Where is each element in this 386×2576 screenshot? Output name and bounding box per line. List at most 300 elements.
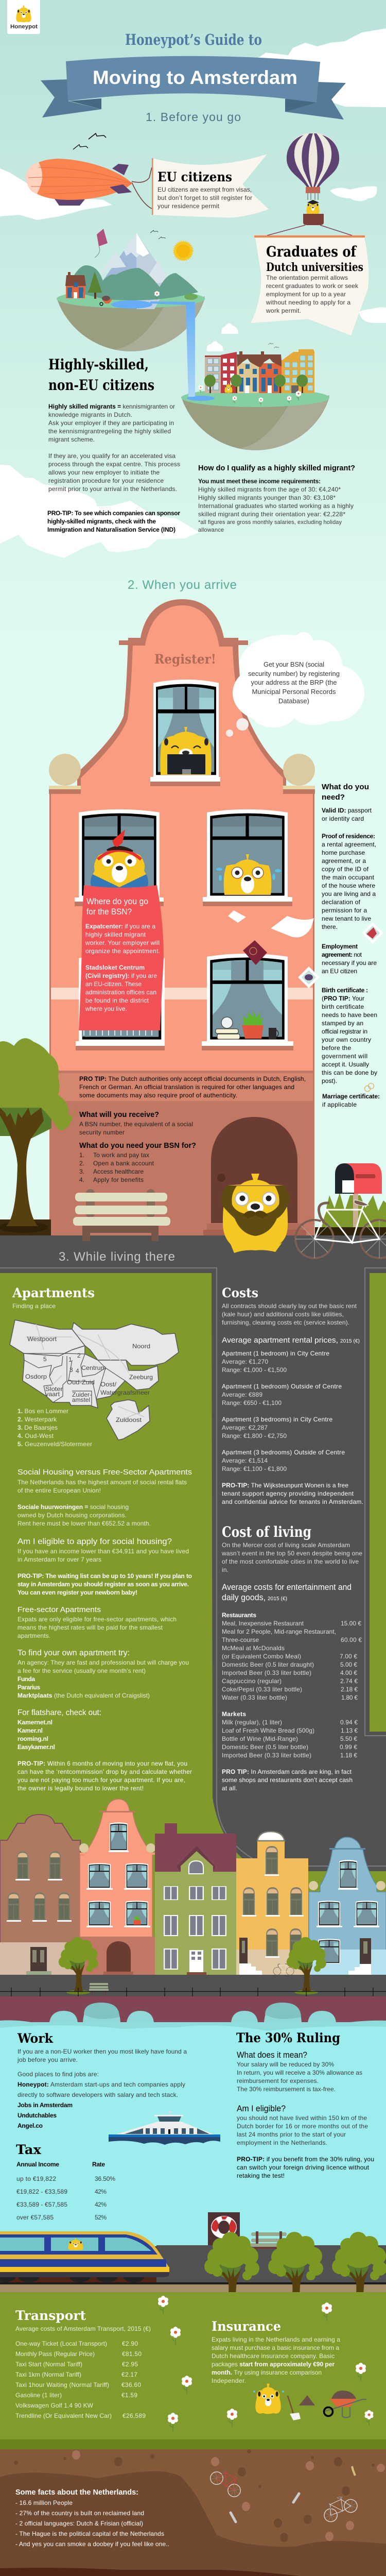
map labels: Centrum (81, 1364, 106, 1371)
text: how do I qualify: *all figures are gross monthly salaries, excluding holiday (198, 519, 342, 526)
text: highly skilled migrants: registration procedure for your residence (48, 477, 164, 484)
heading: average costs (222, 1582, 352, 1602)
house C green (155, 1823, 236, 1976)
text column: what do you need: Valid ID: passport (322, 807, 372, 814)
pro tip: documents: some documents may also require proof of authenticity. (79, 1092, 237, 1099)
text: how do I qualify: International graduates who started working as a highly (198, 502, 354, 510)
find your apartment: To find your own apartment try: (17, 1649, 130, 1657)
heading: Highly-skilled (48, 356, 154, 394)
map labels: amstel (72, 1396, 90, 1403)
pro tip: driving licence: retaking the test! (237, 2172, 285, 2179)
transport table: €2.90 (122, 2340, 138, 2347)
heading: where do you go: Where do you go (86, 897, 148, 906)
tax table: €33,589 - €57,585 (16, 2201, 67, 2208)
mountains (66, 233, 198, 309)
table: restaurants: Coke/Pepsi (0.33 liter bottle) (222, 1686, 302, 1693)
table: markets: Markets (222, 1710, 246, 1718)
text column: what do you need: permission for a (322, 907, 367, 914)
tax table: Annual Income (16, 2161, 59, 2168)
transport table: Gasoline (1 liter) (15, 2392, 62, 2399)
what do you need BSN for: 1. (79, 1151, 84, 1159)
pro tip: documents: French or German. An official translation is required for other languages and (79, 1083, 294, 1091)
social housing (17, 1468, 192, 1527)
pro tip: documents (79, 1075, 306, 1099)
pro tip: sponsors (47, 510, 180, 533)
text column: what do you need: new tenant to live (322, 915, 371, 922)
tax table: 52% (95, 2214, 107, 2221)
what do you need BSN for: Apply for benefits (93, 1176, 144, 1183)
costs intro: All contracts should clearly lay out the basic rent (222, 1302, 357, 1310)
heading: average costs: daily goods, (222, 1592, 266, 1602)
buried bikes and bottles (208, 2464, 359, 2524)
Mercer text (221, 1541, 362, 1573)
find your apartment: Funda (17, 1675, 35, 1683)
rental prices: Range: €1,100 - €1,800 (222, 1465, 287, 1472)
table: restaurants: Water (0.33 liter bottle) (222, 1694, 287, 1701)
house B salmon (79, 1799, 155, 1975)
what do you need BSN for: Access healthcare (93, 1168, 144, 1175)
panel: transport (15, 2308, 151, 2419)
house D yellow (236, 1832, 308, 1975)
tax table: 42% (95, 2188, 107, 2195)
table: restaurants: McMeal at McDonalds (222, 1645, 285, 1652)
bubble text (248, 660, 340, 705)
insurance text: Independer. (212, 2377, 246, 2384)
work text: Jobs in Amsterdam (17, 2102, 73, 2109)
heading: EU citizens: EU citizens (157, 170, 232, 184)
Graduates text: employment for up to a year (266, 291, 346, 298)
left tree and planter (0, 1038, 75, 1235)
find your apartment (17, 1649, 189, 1699)
table: restaurants: 5.00 € (340, 1661, 357, 1668)
heading: Register: Register! (154, 652, 216, 667)
table: restaurants: Domestic Beer (0.5 liter draught) (222, 1661, 314, 1668)
text column: what do you need: you are living and a (322, 890, 376, 897)
what does it mean: What does it mean? (237, 2050, 307, 2060)
text column: what do you need: agreement, or a (322, 857, 366, 865)
pro tip: driving licence: PRO-TIP: if you benefit from the 30% ruling, you (237, 2156, 374, 2163)
icon: mug (269, 1028, 278, 1039)
what will you receive: A BSN number, the equivalent of a social (79, 1121, 193, 1128)
section heading 3: 3. While living there (59, 1250, 175, 1264)
find your apartment: a fee for the service (usually one month’s rent) (17, 1667, 146, 1674)
pro tip: Wijksteunpunt (222, 1482, 363, 1505)
dirt pile (299, 2395, 315, 2405)
flatshare: rooming.nl (17, 1735, 48, 1742)
am I eligible: Am I eligible? (237, 2104, 286, 2113)
panel: Graduates sign (251, 235, 369, 335)
text column: what do you need: birth certificate (322, 1003, 364, 1010)
am I eligible: Dutch border for 16 or more months out of the (237, 2123, 368, 2130)
text: how do I qualify: You must meet these income requirements: (198, 478, 321, 485)
tax table: over €57,585 (16, 2214, 54, 2221)
bubble text: Database) (278, 697, 309, 705)
main house (49, 599, 315, 1235)
pro tip: cards (222, 1768, 353, 1792)
map labels: Zuider- (72, 1391, 92, 1398)
transport table (15, 2325, 151, 2419)
rental prices: Apartment (1 bedroom) Outside of Centre (222, 1383, 342, 1390)
map labels: Westpoort (27, 1335, 57, 1343)
icon: kite (95, 229, 108, 258)
rental prices: Average: €1,270 (222, 1358, 268, 1365)
map legend: 2. Westerpark (17, 1416, 57, 1423)
blimp with banner (26, 154, 269, 217)
flatshare: Easykamer.nl (17, 1743, 55, 1751)
text: how do I qualify: skilled migrant during their orientation year: €2,228* (198, 511, 345, 518)
pro tip: cards: some shops and restaurants don’t accept cash (222, 1776, 353, 1784)
icon: house stamp (362, 922, 383, 944)
pro tip: waiting list: PRO-TIP: The waiting list can be up to 10 years! If you plan to (17, 1572, 192, 1580)
map labels: Noord (132, 1343, 150, 1350)
panel: insurance (212, 2319, 366, 2420)
table: markets: Bottle of Wine (Mid-Range) (222, 1735, 298, 1742)
text column: what do you need: this can be done by (322, 1069, 377, 1076)
work text: If you are a non-EU worker then you most likely have found a (17, 2048, 187, 2055)
map legend: 5. Geuzenveld/Slotermeer (17, 1440, 92, 1448)
what do you need BSN for: 4. (79, 1176, 84, 1183)
heading: Highly-skilled: non-EU citizens (48, 377, 154, 394)
transport table: Taxi Start (Normal Tariff) (15, 2361, 82, 2368)
text column: what do you need: Birth certificate : (322, 987, 368, 994)
costs intro (222, 1302, 357, 1326)
map labels: 4 (76, 1367, 79, 1375)
icon: honeypot bear (16, 6, 31, 22)
flower (154, 291, 160, 300)
work text: Good places to find jobs are: (17, 2071, 99, 2078)
transport table: €36.60 (121, 2381, 141, 2388)
map labels: Osdorp (25, 1373, 47, 1380)
table: restaurants: 60.00 € (341, 1636, 362, 1643)
mailbox (315, 1163, 386, 1235)
what does it mean: The 30% reimbursement is tax-free. (237, 2086, 336, 2093)
lake (111, 300, 152, 309)
bear passenger (68, 2239, 83, 2250)
rental prices: Average: €1,514 (222, 1457, 268, 1464)
heading: where do you go: for the BSN? (86, 907, 132, 917)
what does it mean: In return, you will receive a 30% allowance as (237, 2069, 362, 2076)
papers (228, 910, 314, 938)
rental prices: Range: €650 - €1,100 (222, 1399, 282, 1406)
table: restaurants: 7.00 € (340, 1653, 357, 1660)
birds (150, 230, 166, 239)
text: highly skilled migrants: If they are, you qualify for an accelerated visa (48, 452, 176, 460)
icon: plant (242, 1010, 264, 1039)
house (65, 272, 86, 298)
text: how do I qualify: allowance (198, 527, 224, 533)
text: how do I qualify: Highly skilled migrants from the age of 30: €4,240* (198, 486, 341, 493)
eligibility: in Amsterdam for over 7 years (17, 1556, 101, 1563)
pro tip: sponsors: highly-skilled migrants, check with the (47, 518, 156, 525)
rental prices: Apartment (3 bedrooms) Outside of Centre (222, 1449, 345, 1456)
facts about the Netherlands: Some facts about the Netherlands: (15, 2488, 138, 2497)
insurance text: packages start from approximately €90 per (212, 2361, 335, 2368)
transport table: €26,589 (122, 2412, 146, 2419)
pro tip: Wijksteunpunt: tenant support agency providing independent (222, 1490, 354, 1497)
what do you need BSN for: 2. (79, 1160, 84, 1167)
title: Honeypot's Guide to: Honeypot’s Guide to (125, 31, 262, 48)
banner text (85, 923, 160, 1012)
section heading 1: 1. Before you go (146, 110, 241, 124)
window bottom left under banner (76, 955, 165, 1050)
transport table: Taxi 1hour Waiting (Normal Tariff) (15, 2381, 109, 2388)
street trees (59, 1937, 326, 1994)
what will you receive: security number (79, 1129, 125, 1136)
icon: sun (174, 242, 192, 260)
map labels: 2 (77, 1352, 81, 1359)
text column: what do you need: necessary if you are (322, 959, 377, 967)
banner text: an EU-citizen. These (85, 980, 142, 988)
railing (0, 1988, 386, 1997)
trees (204, 375, 308, 393)
table: restaurants: Imported Beer (0.33 liter bottle) (222, 1669, 311, 1676)
text: highly skilled migrants: permit prior to your arrival in the Netherlands. (48, 485, 177, 493)
facade (49, 794, 314, 1235)
panel: apartments (10, 1285, 192, 1792)
banner text: Stadsloket Centrum (85, 964, 145, 971)
insurance text: salary must purchase a basic insurance from a (212, 2344, 339, 2351)
Mercer text: wasn’t event in the top 50 even despite being one (221, 1550, 362, 1557)
tax table: up to €19,822 (16, 2175, 56, 2182)
bubble text: Get your BSN (social (264, 660, 324, 668)
eligibility: Am I eligible to apply for social housing? (17, 1537, 172, 1546)
platform bench (250, 2231, 287, 2252)
window bottom right with objects (202, 940, 293, 1050)
icon: pacifier stamp (298, 967, 320, 988)
canal wall with arches (0, 1996, 386, 2023)
floating island: mountains (57, 229, 205, 351)
icon: rings (364, 1083, 374, 1091)
lifebuoy post (208, 2212, 240, 2245)
text column: what do you need: copy of the ID of (322, 866, 369, 873)
text column: what do you need: official registrar in (322, 1028, 367, 1035)
text column: what do you need: government will (322, 1053, 367, 1060)
rental prices: Apartment (1 bedroom) in City Centre (222, 1350, 329, 1357)
what will you receive (79, 1110, 193, 1136)
Mercer text: On the Mercer cost of living scale Amsterdam (222, 1541, 350, 1549)
pro tip: waiting list: stay in Amsterdam you should register as soon as you arrive. (17, 1581, 189, 1588)
text column: what do you need: home purchase (322, 849, 365, 856)
am I eligible: last 24 months prior to the start of your (237, 2131, 346, 2138)
free sector: Expats are only eligible for free-sector apartments, which (17, 1616, 177, 1623)
birds (73, 133, 106, 149)
pro tip: rent commission: the owner is legally bound to lower the rent! (17, 1785, 144, 1792)
rental prices: Average: €889 (222, 1391, 262, 1398)
thought bubble (226, 632, 364, 737)
rental prices: Range: €1,000 - €1,500 (222, 1366, 287, 1374)
table: markets: Loaf of Fresh White Bread (500g) (222, 1727, 314, 1734)
tax table: 36.50% (95, 2175, 115, 2182)
text column: what do you need: Proof of residence: (322, 833, 375, 840)
title ribbon (41, 56, 346, 120)
what do you need BSN for: What do you need your BSN for? (79, 1141, 196, 1150)
what do you need BSN for: 3. (79, 1168, 84, 1175)
table: markets (222, 1710, 358, 1759)
free sector: means the highest rates will be paid for the smallest (17, 1624, 163, 1631)
logo card (7, 0, 40, 34)
insurance text: Expats living in the Netherlands and earning a (212, 2336, 340, 2343)
banner text: Expatcenter: if you are a (85, 923, 155, 930)
ground: asphalt (0, 1235, 386, 1277)
rental prices: Average: €2,287 (222, 1424, 268, 1431)
panel: tax (16, 2142, 115, 2221)
am I eligible (237, 2104, 368, 2146)
table: markets: 1.13 € (341, 1727, 358, 1734)
icon: passport (243, 940, 267, 965)
table: restaurants: 2.74 € (340, 1677, 358, 1685)
text: highly skilled migrants: Highly skilled migrants = kennismigranten or (48, 403, 175, 410)
transport table: Volkswagen Golf 1.4 90 KW (15, 2402, 94, 2409)
floating island: town (181, 343, 329, 450)
urns (49, 754, 315, 794)
table: restaurants: 1.80 € (341, 1694, 358, 1701)
eligibility (17, 1537, 189, 1563)
text: how do I qualify: Highly skilled migrants younger than 30: €3,108* (198, 494, 336, 501)
gable (77, 599, 286, 796)
flatshare: For flatshare, check out: (17, 1708, 101, 1717)
text: highly skilled migrants: allows your new employer to initiate the (48, 469, 160, 476)
pro tip: cards: PRO TIP: In Amsterdam cards are king, in fact (222, 1768, 352, 1775)
house A brown (0, 1815, 80, 1975)
facts about the Netherlands: - The Hague is the political capital of the Netherlands (15, 2530, 164, 2537)
Graduates text: The orientation permit allows (266, 274, 348, 281)
pro tip: rent commission (17, 1760, 192, 1792)
text column: what do you need: Employment (322, 943, 358, 950)
cloud: small right (330, 187, 377, 201)
what will you receive: What will you receive? (79, 1110, 159, 1119)
text: how do I qualify: How do I qualify as a highly skilled migrant? (198, 464, 355, 472)
eligibility: If you have an income lower than €34,911 and you have lived (17, 1548, 189, 1555)
pro tip: sponsors: Immigration and Naturalisation Service (IND) (47, 526, 176, 533)
section heading 2: 2. When you arrive (128, 578, 237, 592)
rental prices: 2015 (€) (340, 1338, 360, 1344)
map legend: 3. De Baarsjes (17, 1424, 58, 1431)
transport table: €2.95 (122, 2361, 138, 2368)
pro tip: cards: at all. (222, 1785, 237, 1792)
EU citizens text: your residence permit (157, 202, 220, 210)
text column: what do you need: stamped by an (322, 1020, 363, 1027)
text column: what do you need: a rental agreement, (322, 841, 376, 848)
rental prices: Range: €1,800 - €2,750 (222, 1432, 287, 1439)
pro tip: sponsors: PRO-TIP: To see which companies can sponsor (47, 510, 180, 517)
flowers (199, 385, 301, 405)
tree (87, 272, 102, 299)
Mercer text: in. (222, 1566, 229, 1573)
map labels: Oost/ (100, 1381, 117, 1388)
buildings row (205, 349, 314, 393)
table: restaurants: 4.00 € (340, 1669, 357, 1676)
heading: Costs: Costs (222, 1285, 258, 1300)
soil layers (0, 2449, 386, 2576)
text column: what do you need: there. (322, 923, 338, 930)
social housing: owned by Dutch housing corporations. (17, 1512, 127, 1519)
table: restaurants: Restaurants (222, 1612, 256, 1619)
map legend (17, 1408, 92, 1448)
map labels: vaart (45, 1391, 60, 1398)
wheelbarrow (100, 296, 112, 306)
panel: 30% ruling (236, 2030, 374, 2179)
cloud: right edge (359, 307, 386, 323)
heading: Transport: Transport (15, 2308, 86, 2323)
table: restaurants: 2.18 € (341, 1686, 358, 1693)
find your apartment: Pararius (17, 1684, 40, 1691)
small bench (89, 1983, 109, 1993)
what do you need BSN for (79, 1141, 196, 1183)
door (203, 1117, 306, 1235)
table: restaurants: Cappuccino (regular) (222, 1677, 282, 1685)
transport table: Monthly Pass (Regular Price) (15, 2350, 95, 2358)
text: how do I qualify (198, 464, 355, 533)
banner text: administration offices can (85, 989, 156, 996)
waterfall (186, 302, 195, 397)
shovel (288, 2396, 301, 2420)
find your apartment: Marktplaats (the Dutch equivalent of Craigslist) (17, 1692, 150, 1699)
text: highly skilled migrants: Ask your employer if they are participating in (48, 419, 174, 427)
map labels (25, 1335, 153, 1423)
EU citizens text: EU citizens are exempt from visas, (157, 186, 252, 193)
pro tip: driving licence: can switch your foreign driving licence without (237, 2164, 370, 2171)
middle right window with glasses bear (203, 809, 292, 906)
work text: Honeypot: Amsterdam start-ups and tech companies apply (17, 2081, 185, 2088)
insurance text (212, 2336, 340, 2384)
map labels: Zuidoost (116, 1416, 142, 1423)
pro tip: rent commission: PRO-TIP: Within 6 months of moving into your new flat, you (17, 1760, 187, 1767)
pro tip: driving licence (237, 2156, 374, 2179)
text column: what do you need: agreement: not (322, 951, 362, 958)
heading: Dutch universities: Dutch universities (266, 261, 363, 274)
tax table: Rate (92, 2161, 105, 2168)
table: markets: 0.94 € (340, 1719, 358, 1726)
social housing: The Netherlands has the highest amount of social rental flats (17, 1479, 187, 1486)
pro tip: waiting list: You can even register your newborn baby! (17, 1589, 137, 1596)
text: highly skilled migrants (48, 403, 180, 493)
rental prices: Apartment (3 bedrooms) in City Centre (222, 1416, 332, 1423)
table: restaurants: (or Equivalent Combo Meal) (222, 1653, 301, 1660)
Graduates text: work permit. (266, 307, 301, 314)
heading: Highly-skilled: Highly-skilled, (48, 356, 149, 373)
heading: Graduates: Graduates of (266, 243, 357, 260)
text: highly skilled migrants: migrant scheme. (48, 436, 95, 443)
canal water (0, 2020, 386, 2246)
background sky (0, 0, 386, 1288)
heading: Insurance: Insurance (212, 2319, 281, 2334)
Graduates text: recent graduates to work or seek (266, 282, 359, 290)
insurance text: month. Try using insurance comparison (212, 2369, 322, 2376)
panel: red banner where do you go (79, 885, 164, 1037)
facts about the Netherlands: - 16.6 million People (15, 2499, 73, 2506)
ferry boat (109, 2111, 220, 2145)
green ground (0, 1273, 386, 1975)
table: restaurants: Three-course (222, 1636, 259, 1643)
map labels: Oud-Zuid (67, 1379, 95, 1386)
pro tip: rent commission: you are not paying too much for your apartment. If you are, (17, 1776, 185, 1784)
middle left window with bandana bear (75, 809, 164, 906)
table: markets: Domestic Beer (0.5 liter bottle) (222, 1743, 308, 1751)
free sector: Free-sector Apartments (17, 1605, 101, 1614)
table: markets: 0.99 € (340, 1743, 357, 1751)
social housing: of the entire European Union! (17, 1487, 101, 1494)
facts about the Netherlands: - And yes you can smoke a doobey if you feel like one.. (15, 2540, 169, 2548)
cloud: small 2 (207, 341, 223, 351)
table: markets: 1.18 € (340, 1752, 357, 1759)
what does it mean: reimbursement for expenses. (237, 2077, 319, 2084)
facts about the Netherlands (15, 2488, 169, 2548)
map legend: 4. Oud-West (17, 1432, 54, 1439)
rental prices (222, 1336, 360, 1472)
pro tip: Wijksteunpunt: PRO-TIP: The Wijksteunpunt Wonen is a free (222, 1482, 348, 1489)
map labels: Watergraafsmeer (100, 1389, 150, 1396)
facts about the Netherlands: - 2 official languages: Dutch & Frisian (official) (15, 2520, 143, 2527)
